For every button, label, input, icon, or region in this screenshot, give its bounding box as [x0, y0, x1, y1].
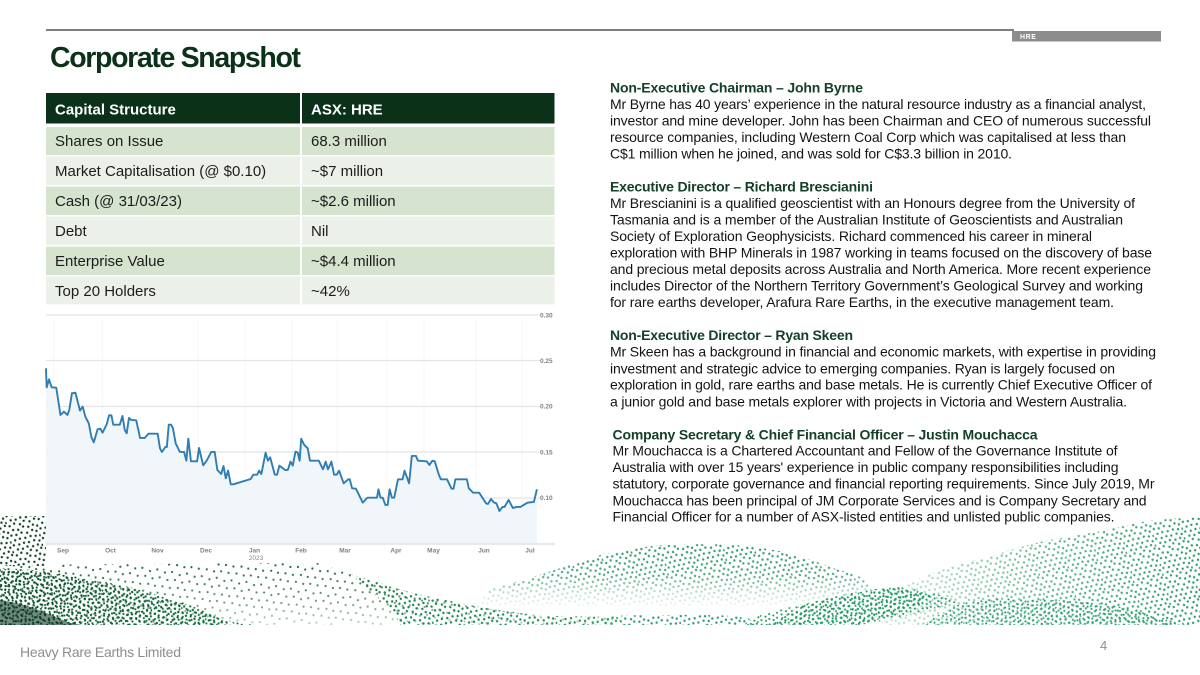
bio: Richard Brescianini: Tasmania and is a member of the Australian Institute of Geoscientists and Australian	[610, 212, 1123, 228]
y axis labels: 0.15	[540, 450, 553, 456]
table header: ASX: HRE	[311, 102, 383, 118]
bio: Justin Mouchacca: Australia with over 15 years' experience in public company responsibilities including	[612, 459, 1118, 475]
x axis labels: Oct	[105, 548, 117, 554]
title: Corporate Snapshot	[50, 42, 302, 74]
x axis labels: Sep	[57, 548, 69, 554]
bio: Ryan Skeen: exploration in gold, rare earths and base metals. He is currently Chief Executive Officer of	[610, 377, 1152, 393]
bio: Richard Brescianini: Executive Director – Richard Brescianini	[610, 178, 873, 194]
bio: John Byrne: resource companies, including Western Coal Corp which was capitalised at less than	[610, 129, 1126, 145]
capital structure table	[46, 93, 554, 304]
bio: Ryan Skeen	[610, 327, 1156, 409]
bio: John Byrne: C$1 million when he joined, and was sold for C$3.3 billion in 2010.	[610, 146, 1012, 162]
bio: Richard Brescianini	[610, 178, 1152, 310]
price area	[46, 368, 537, 544]
y axis labels: 0.10	[540, 495, 553, 502]
share price chart	[46, 308, 556, 563]
x axis labels: Jan	[249, 548, 260, 554]
dots: top-left cluster	[0, 516, 46, 566]
x axis labels: Apr	[390, 548, 402, 554]
x axis labels: Jul	[525, 548, 535, 554]
bio: Richard Brescianini: for rare earths developer, Arafura Rare Earths, in the executive management team.	[610, 294, 1114, 310]
row: enterprise value: Enterprise Value	[55, 253, 165, 270]
x axis labels: Jun	[478, 548, 490, 554]
dots: left green hill	[0, 568, 255, 625]
row: cash	[46, 186, 554, 215]
bio: John Byrne: Non-Executive Chairman – John Byrne	[610, 80, 863, 96]
bio: Richard Brescianini: Society of Exploration Geophysicists. Richard commenced his career in mineral	[610, 228, 1092, 244]
x axis labels: Feb	[295, 548, 307, 554]
bio: Ryan Skeen: Mr Skeen has a background in financial and economic markets, with expertise in providing	[610, 344, 1156, 360]
table header: Capital Structure	[55, 102, 176, 118]
bio: John Byrne	[610, 80, 1151, 162]
bio: Richard Brescianini: exploration with BHP Minerals in 1987 working in teams focused on the discovery of base	[610, 244, 1152, 260]
dots: low lump second layer	[770, 588, 935, 625]
row: enterprise value	[46, 246, 554, 275]
bio: Justin Mouchacca: Financial Officer for a number of ASX-listed entities and unlisted public companies.	[612, 509, 1114, 525]
dots: left green hill second layer	[0, 569, 240, 625]
row: top 20 holders	[46, 276, 554, 304]
section tag: HRE: HRE	[1020, 34, 1037, 41]
row: top 20 holders: ~42%	[311, 283, 350, 300]
row: shares on issue: 68.3 million	[311, 133, 387, 150]
dots: dark foreground hill	[0, 600, 82, 625]
x axis labels: Dec	[200, 548, 212, 554]
row: market capitalisation	[46, 156, 554, 185]
y axis labels: 0.25	[540, 358, 553, 365]
row: market capitalisation: ~$7 million	[311, 163, 383, 180]
y axis labels: 0.20	[540, 404, 553, 410]
bio: Ryan Skeen: investment and strategic advice to emerging companies. Ryan is largely focused on	[610, 360, 1115, 376]
row: shares on issue: Shares on Issue	[55, 133, 163, 150]
row: shares on issue	[46, 127, 554, 155]
dots: mid hill sparse field	[0, 563, 613, 625]
row: enterprise value: ~$4.4 million	[311, 253, 396, 270]
section tag: HRE	[1012, 31, 1161, 42]
bio: Justin Mouchacca	[612, 426, 1155, 525]
bio: Ryan Skeen: a junior gold and base metals explorer with projects in Victoria and Western Australia.	[610, 393, 1127, 409]
dots: lower right band	[920, 598, 1192, 625]
x axis labels: Mar	[339, 548, 351, 554]
bio: Richard Brescianini: and precious metal deposits across Australia and North America. More recent experience	[610, 261, 1151, 277]
bio: Justin Mouchacca: Company Secretary & Chief Financial Officer – Justin Mouchacca	[612, 426, 1038, 442]
bio: Justin Mouchacca: Mr Mouchacca is a Chartered Accountant and Fellow of the Governance Institute of	[612, 442, 1118, 458]
bio: Richard Brescianini: includes Director of the Northern Territory Government’s Geological Survey and working	[610, 278, 1143, 294]
row: debt: Nil	[311, 223, 328, 240]
bio: Justin Mouchacca: Mouchacca has been principal of JM Corporate Services and is Company Secretary and	[612, 492, 1146, 508]
y axis labels	[540, 312, 553, 502]
x axis labels: May	[427, 548, 440, 554]
dots: centre hill	[480, 544, 875, 606]
row: debt	[46, 216, 554, 245]
bio: John Byrne: investor and mine developer. John has been Chairman and CEO of numerous successful	[610, 112, 1151, 128]
row: debt: Debt	[55, 223, 88, 240]
y axis labels: 0.30	[540, 312, 553, 320]
row: cash: ~$2.6 million	[311, 193, 396, 210]
dots: low strip	[600, 615, 770, 625]
footer company name: Heavy Rare Earths Limited	[20, 644, 181, 660]
dots: low lump	[743, 587, 958, 625]
x axis labels: Nov	[151, 548, 164, 554]
bio: John Byrne: Mr Byrne has 40 years’ experience in the natural resource industry as a financial analyst,	[610, 96, 1146, 112]
row: cash: Cash (@ 31/03/23)	[55, 193, 182, 210]
table header	[46, 93, 554, 124]
x axis labels: 2023	[249, 555, 264, 562]
row: top 20 holders: Top 20 Holders	[55, 283, 156, 300]
dots: right hill	[880, 517, 1200, 625]
bio: Justin Mouchacca: statutory, corporate governance and financial reporting requirements. Since July 2019, Mr	[612, 476, 1155, 492]
header rule	[46, 29, 1014, 31]
row: market capitalisation: Market Capitalisation (@ $0.10)	[55, 163, 266, 180]
dotted hills landscape	[0, 516, 1200, 625]
bio: Richard Brescianini: Mr Brescianini is a qualified geoscientist with an Honours degree from the University of	[610, 195, 1135, 211]
bio: Ryan Skeen: Non-Executive Director – Ryan Skeen	[610, 327, 853, 343]
dots: mid hill dense ridge	[350, 574, 613, 625]
page number: 4	[1100, 638, 1107, 653]
x axis labels	[57, 548, 535, 562]
